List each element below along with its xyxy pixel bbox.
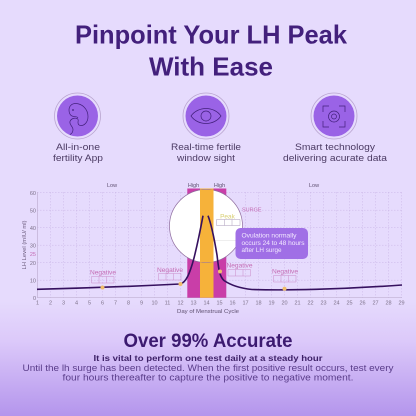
x axis labels: 11 [165,300,170,306]
x axis labels: 22 [307,300,314,306]
x axis labels: 1 [36,300,39,306]
fertility level labels: High [188,183,199,189]
x axis labels: 14 [203,300,210,306]
negative test marker: day 12: Negative [157,267,183,274]
feature label: fertile window [171,142,241,164]
fertility level labels: Low [309,183,319,189]
x axis title: Day of Menstrual Cycle [177,309,239,315]
x axis labels: 10 [151,300,158,306]
negative test marker: day 6: Negative [90,270,116,276]
x axis labels: 5 [88,300,91,306]
x axis labels: 23 [320,300,327,306]
x axis labels: 6 [101,300,104,306]
axes [38,192,402,298]
feature label: fertility app: fertility App [53,153,103,164]
testing instructions: four hours thereafter to capture the positive to negative moment. [62,372,354,382]
y axis labels: 0 [33,296,36,302]
x axis labels: 28 [385,300,392,306]
y axis labels: 30 [30,244,36,250]
x axis labels: 20 [281,300,288,306]
y axis labels [30,191,36,302]
negative test marker: day 12 [157,267,183,280]
feature label: fertile window: Real-time fertile [171,142,241,153]
feature label: smart technology [283,142,388,164]
feature label: smart technology: delivering acurate data [283,153,388,164]
x axis labels: 12 [177,300,184,306]
fertility level labels [107,183,319,189]
x axis labels: 29 [398,300,405,306]
x axis labels: 8 [127,300,130,306]
accuracy heading: Over 99% Accurate [124,331,292,352]
bold instruction: It is vital to perform one test daily at a steady hour [94,353,323,363]
x axis labels: 25 [346,300,353,306]
feature label: fertile window: window sight [176,153,235,164]
peak test marker: Peak [220,214,236,220]
negative test marker: day 20 [272,268,298,282]
x axis labels: 2 [49,300,52,306]
y axis labels: 40 [30,226,36,232]
x axis labels: 15 [216,300,223,306]
x axis labels: 19 [268,300,275,306]
magnifier circle [170,190,242,262]
feature label: fertility app [53,142,103,164]
x axis labels: 16 [229,300,236,306]
x axis labels: 13 [190,300,197,306]
y axis labels: 10 [30,278,36,284]
testing instructions: Until the lh surge has been detected. When the first positive result occurs, test every [22,363,394,373]
icon: eye [183,93,229,139]
y axis labels: 60 [30,191,36,197]
fertility level labels: Low [107,183,117,189]
peak test marker [216,214,240,226]
x axis labels: 18 [255,300,262,306]
chart: LH level over menstrual cycle [22,183,405,315]
feature label: smart technology: Smart technology [295,142,375,153]
title: With Ease [149,52,273,82]
LH curve [37,216,402,290]
x axis labels: 3 [62,300,65,306]
surge label: SURGE [242,208,262,214]
ovulation callout: Ovulation normally [242,232,297,240]
y axis labels: 25 [30,252,36,258]
title [75,20,348,82]
x axis labels: 26 [359,300,366,306]
ovulation callout: after LH surge [242,247,282,254]
icon: target scan [311,93,357,139]
negative test marker: day 6 [90,270,116,283]
ovulation callout [236,228,308,259]
y axis labels: 50 [30,208,36,214]
x axis labels: 24 [333,300,340,306]
curve markers [100,270,286,291]
negative test marker: day 15 [226,262,253,276]
x axis labels: 27 [372,300,379,306]
negative test marker: day 15: Negative [226,262,253,270]
y axis title: LH Level (mIU/ ml) [22,220,28,270]
grid [37,192,402,298]
x axis labels: 4 [75,300,78,306]
title: Pinpoint Your LH Peak [75,20,348,50]
x axis labels: 17 [242,300,249,306]
x axis labels: 9 [140,300,143,306]
fertility level labels: High [214,183,225,189]
negative test marker: day 20: Negative [272,268,298,276]
magenta high band [187,188,226,298]
x axis labels: 7 [114,300,117,306]
x axis labels [36,300,405,306]
feature label: fertility app: All-in-one [56,142,100,153]
y axis labels: 20 [30,261,36,267]
ovulation callout: occurs 24 to 48 hours [242,240,304,247]
x axis labels: 21 [294,300,301,306]
orange peak band [200,188,214,298]
icon: fertility app embryo [54,93,100,139]
testing instructions [22,363,394,382]
